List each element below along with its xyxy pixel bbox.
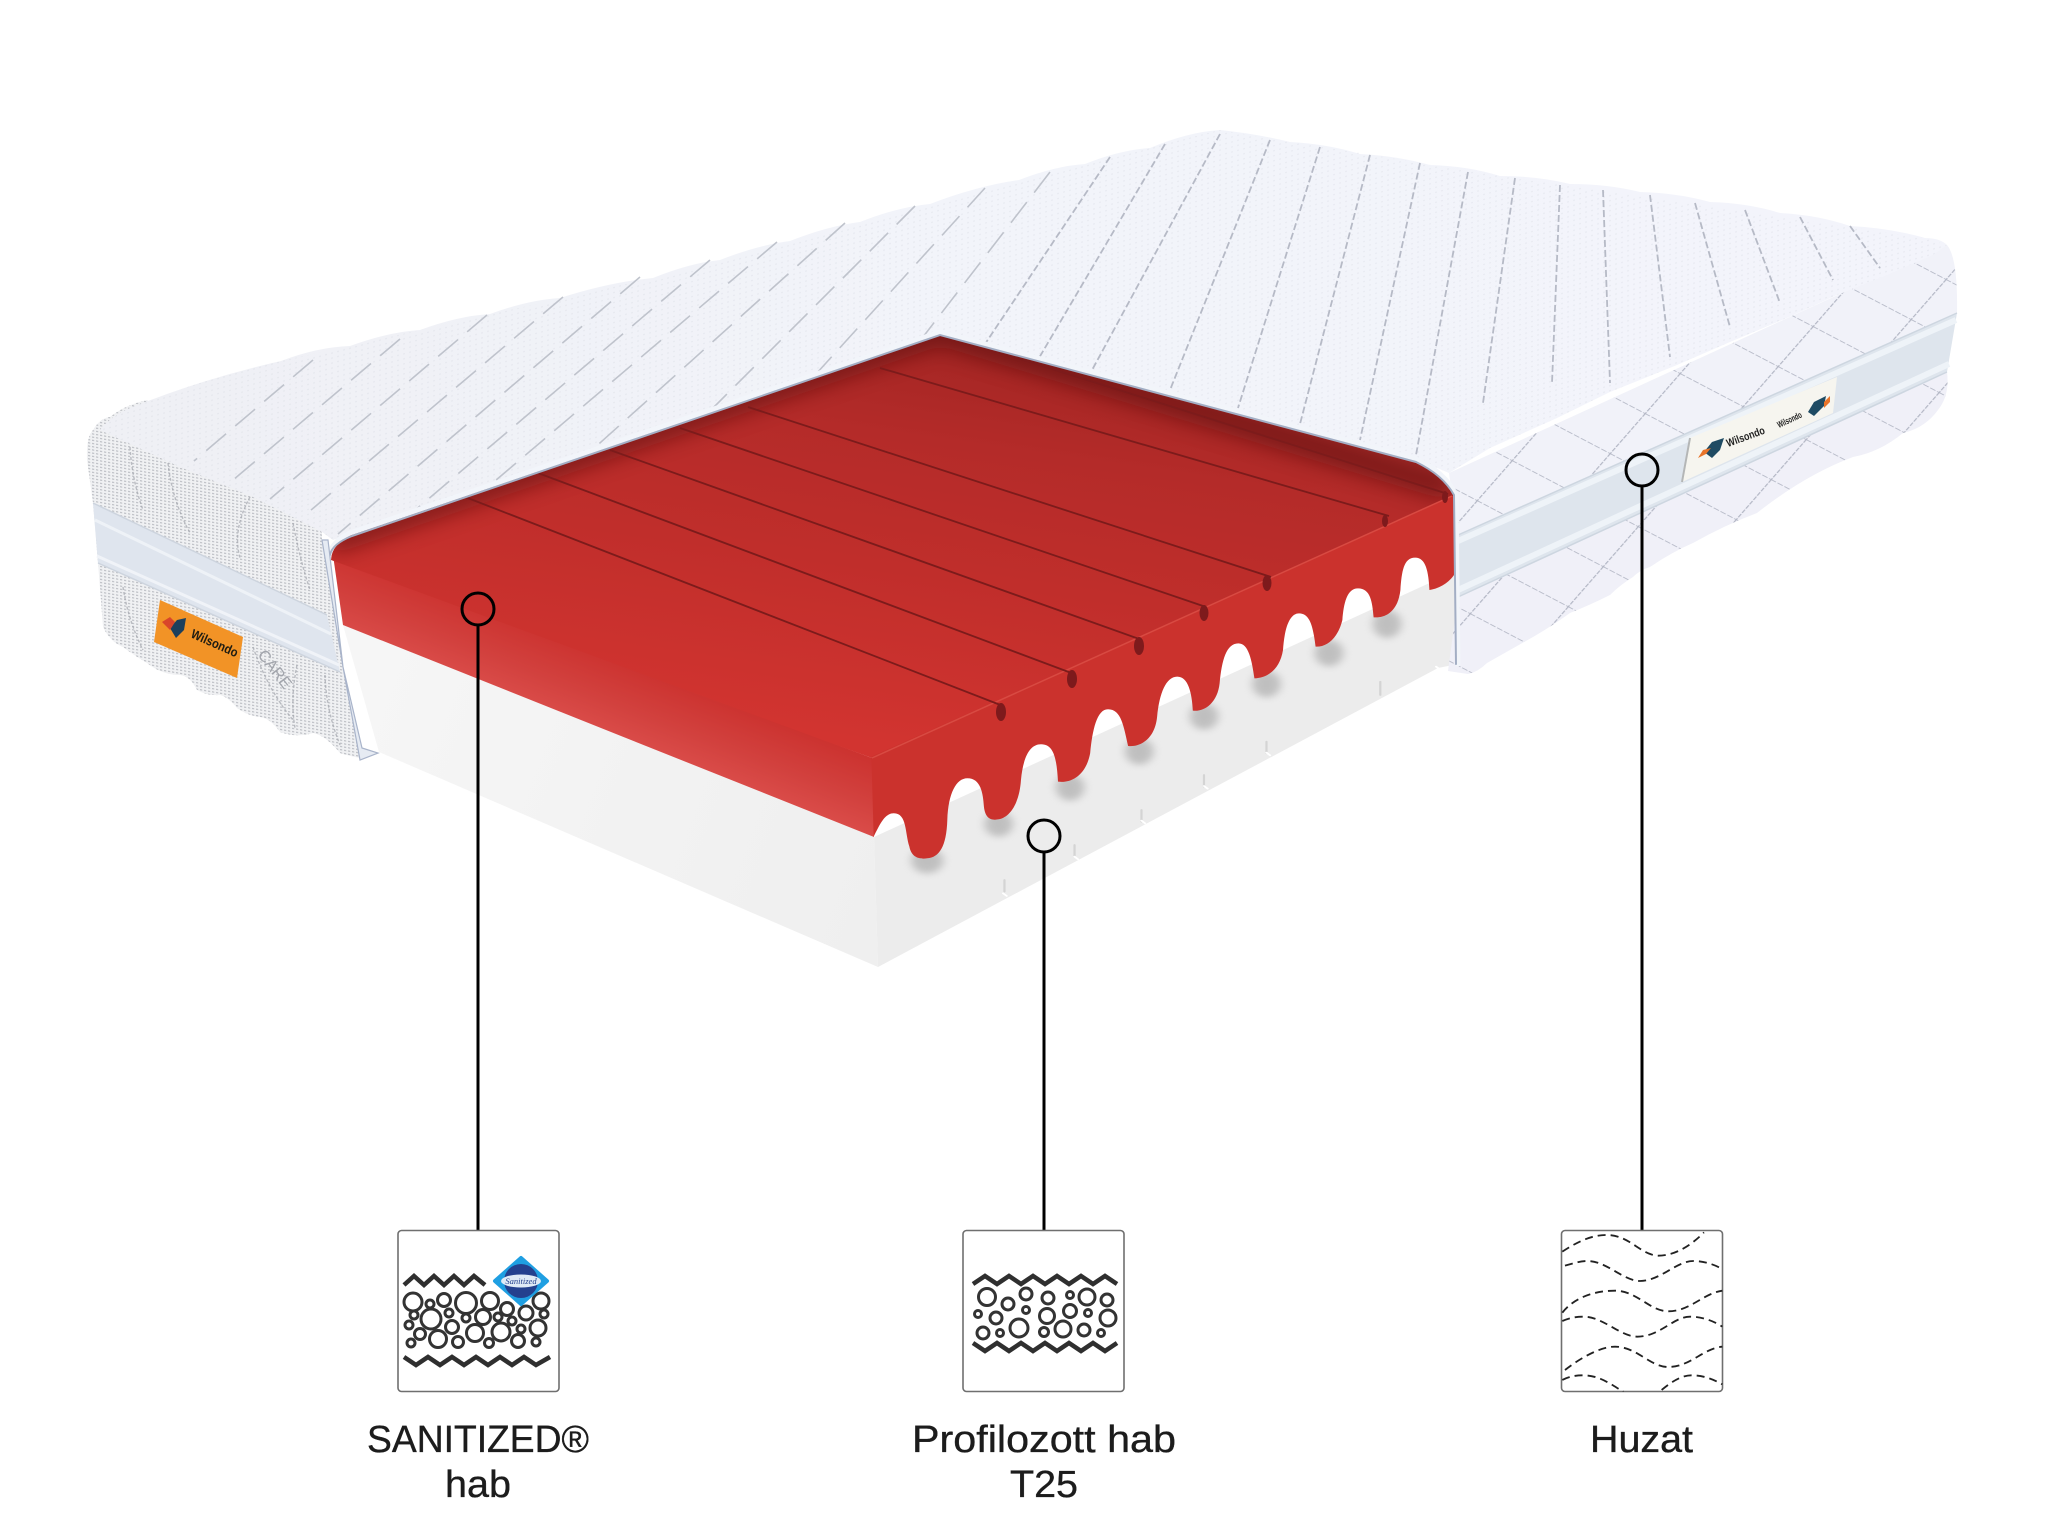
- red foam front edge highlight: [872, 496, 1452, 758]
- red foam: top face: [331, 335, 1455, 758]
- groove holes: [996, 491, 1448, 721]
- icon card: cover: [1562, 1230, 1722, 1392]
- orange label text: Wilsondo: [189, 626, 241, 660]
- red foam: left face: [333, 555, 874, 837]
- right side zipper band: [1458, 313, 1957, 597]
- cover cut edges: [328, 332, 1458, 664]
- red foam: profiled face: [871, 495, 1455, 859]
- right side of cover: upper quilted section: [1449, 245, 1957, 536]
- bottom zigzag: [973, 1343, 1117, 1351]
- icon card: SANITIZED foam: [398, 1230, 559, 1392]
- left zipper band: [93, 503, 340, 672]
- icon card: profiled foam: [963, 1230, 1124, 1392]
- woven curves on left side: [123, 447, 340, 745]
- label: SANITIZED hab: hab: [445, 1464, 511, 1506]
- foam bubbles: [404, 1292, 549, 1348]
- Sanitized badge: [495, 1258, 547, 1304]
- top zigzag: [404, 1276, 485, 1285]
- quilting stitch lines, right part: [985, 134, 1880, 455]
- right label grey tab: [1682, 438, 1690, 482]
- label: Profilozott hab T25: [912, 1419, 1176, 1506]
- right label text left: Wilsondo: [1725, 425, 1767, 450]
- cover left hem: [322, 540, 378, 760]
- right label logo left: [1698, 438, 1724, 458]
- right side of cover: lower quilted section: [1448, 372, 1948, 674]
- callout marker: cover: [1626, 454, 1658, 1232]
- Sanitized badge: Sanitized: [505, 1276, 537, 1286]
- right label logo right: [1808, 396, 1830, 416]
- label: Profilozott hab T25: T25: [1010, 1464, 1078, 1506]
- orange label logo: [162, 617, 186, 638]
- label: Huzat: Huzat: [1590, 1419, 1693, 1461]
- left side of cover: [87, 400, 360, 758]
- foam bubbles: [974, 1288, 1116, 1339]
- mattress illustration: [87, 130, 1957, 967]
- callout marker: SANITIZED foam: [462, 593, 494, 1232]
- top surface of cover: [100, 130, 1947, 540]
- label: Profilozott hab T25: Profilozott hab: [912, 1419, 1176, 1461]
- foam core: white base layer: [343, 570, 1458, 967]
- right label text right: Wilsondo: [1776, 410, 1804, 430]
- label: SANITIZED hab: SANITIZED®: [367, 1419, 589, 1461]
- label: SANITIZED hab: [367, 1419, 589, 1506]
- orange brand label: [154, 600, 243, 678]
- grooves on red foam: [460, 335, 1448, 706]
- top zigzag: [973, 1276, 1117, 1284]
- bottom zigzag: [404, 1357, 550, 1365]
- dashed stitch waves: [1562, 1232, 1722, 1392]
- shadow under cut cover: [330, 332, 1450, 542]
- faint CARE print: CARE: [254, 647, 295, 692]
- quilting stitch lines, left part: [194, 172, 1050, 534]
- right brand label: [1682, 377, 1837, 482]
- callout marker: profiled foam: [1028, 820, 1060, 1232]
